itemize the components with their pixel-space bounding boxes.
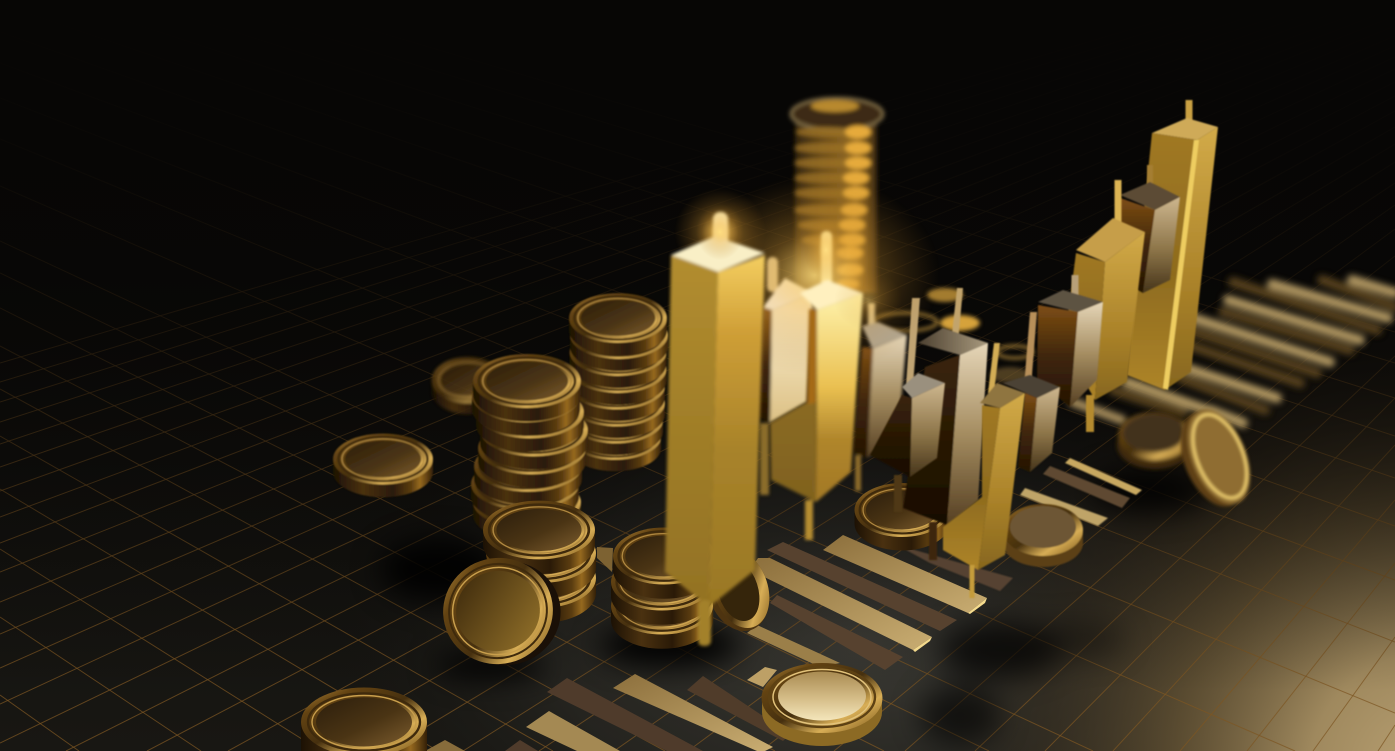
coin: leaning behind tall candle	[696, 541, 780, 639]
candlestick: gold front right	[943, 343, 1025, 598]
far bar chart on floor, out of focus	[1073, 280, 1395, 423]
tall coin stack, out of focus	[791, 98, 883, 293]
coin: bottom left	[301, 688, 427, 751]
coin stack: front	[483, 501, 596, 623]
coin stack: middle	[471, 354, 588, 541]
coin: leaning right, out of focus	[1168, 400, 1263, 516]
candlestick: small right	[1003, 375, 1060, 472]
candlestick: white, middle	[853, 303, 907, 491]
coin stack: beside tall candle	[611, 528, 715, 649]
coins far behind candles, out of focus	[873, 288, 1033, 383]
coin: behind stack, dim	[432, 357, 504, 414]
foreground glow accents	[696, 204, 902, 330]
candlestick: dark right	[1024, 275, 1103, 407]
glow behind bright candles	[674, 175, 940, 375]
coin: flat left	[333, 434, 433, 497]
coin stack: rear	[569, 293, 668, 471]
coin: leaning front	[432, 545, 572, 679]
candlestick: white second	[758, 257, 813, 495]
candlestick: gold upper right	[1064, 180, 1145, 432]
candlestick: dark upper right	[1120, 165, 1180, 293]
coin: under candles centre	[854, 483, 950, 550]
candlestick: tallest far right	[1127, 100, 1218, 390]
coin: under candles right	[1003, 504, 1083, 567]
floor shadows	[380, 468, 1210, 745]
coin: bright bottom centre	[762, 663, 882, 746]
foreground bar chart on floor	[425, 535, 987, 751]
candlestick: bright third	[770, 231, 863, 540]
coin: right, out of focus	[1117, 412, 1193, 469]
candlestick: tallest front	[665, 212, 765, 646]
mid bar chart on floor	[897, 458, 1142, 591]
candlestick: short dark, middle	[870, 298, 945, 512]
candlestick: tall dark, middle	[903, 288, 988, 560]
